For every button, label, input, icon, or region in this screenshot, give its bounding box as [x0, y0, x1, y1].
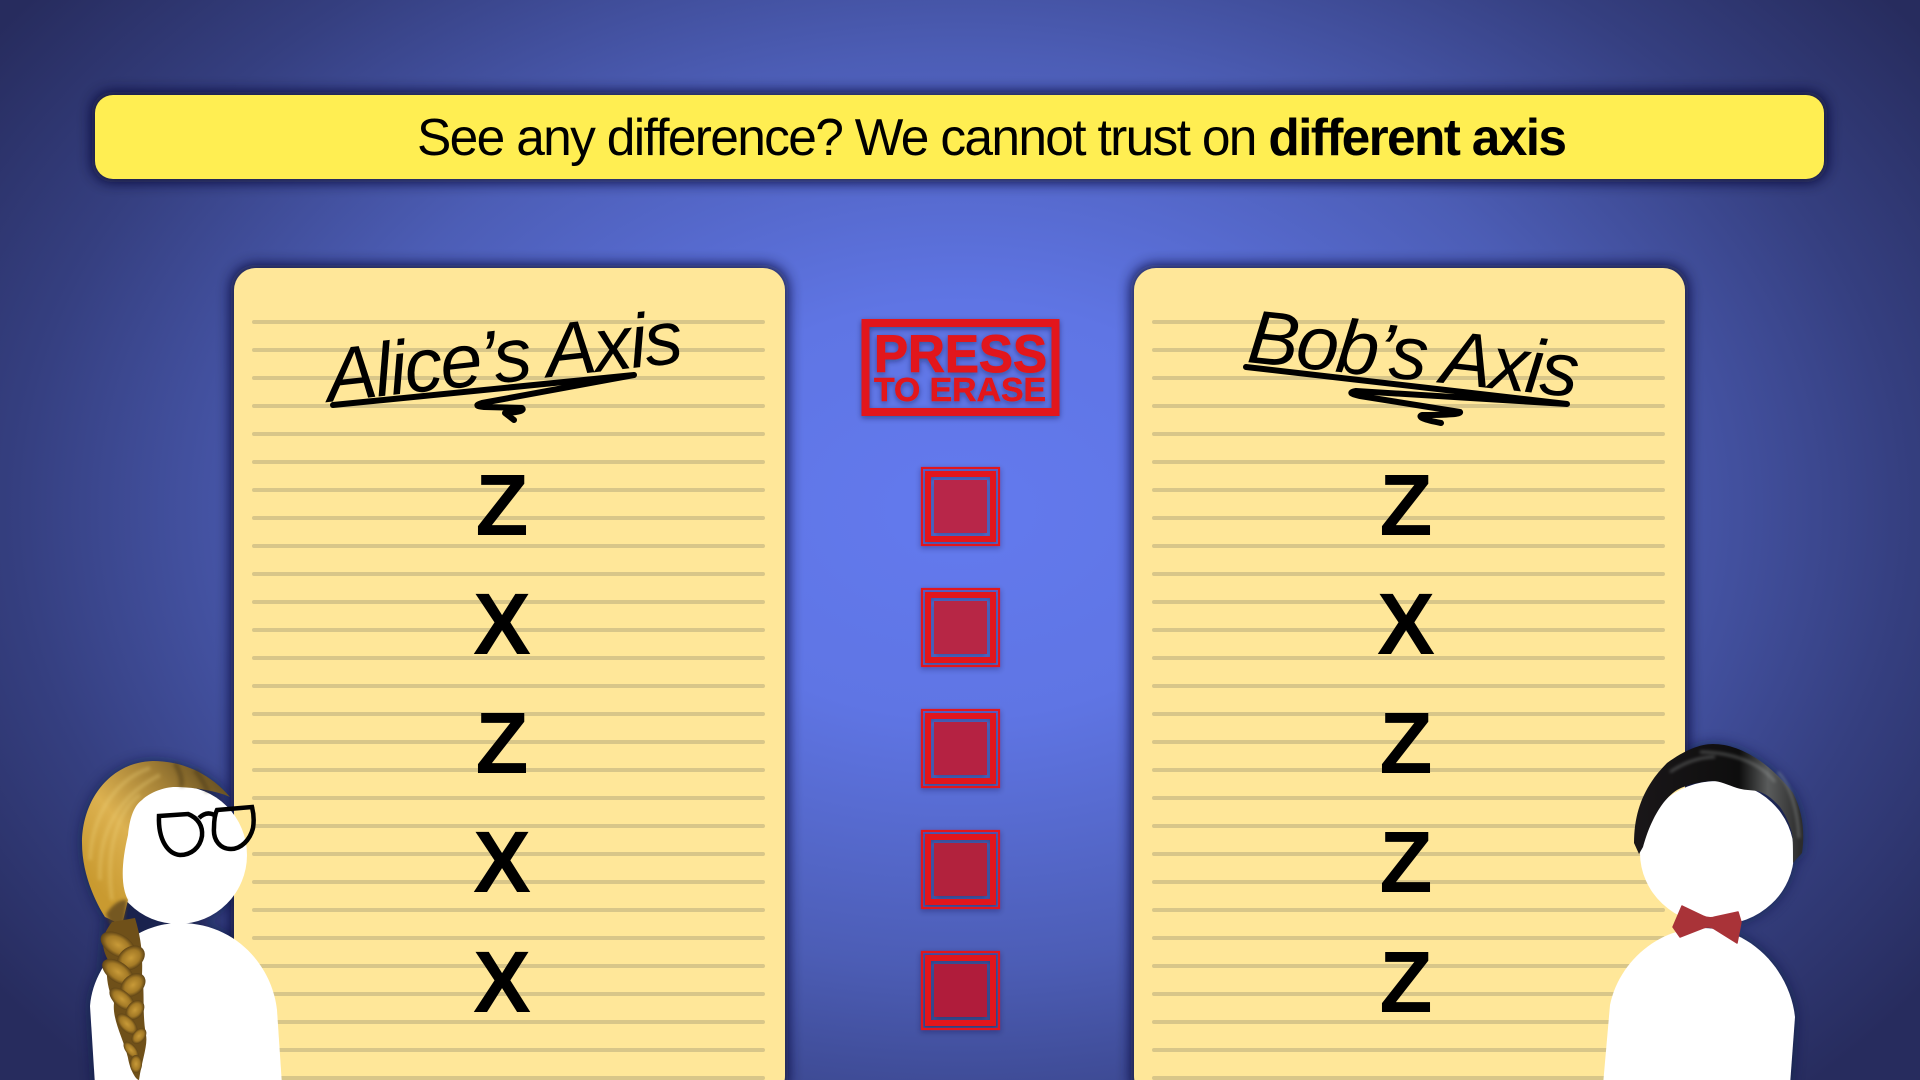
panel: Bob's axis	[1131, 265, 1688, 1080]
button 3	[922, 710, 999, 787]
letters: Alice's answers: Z	[475, 457, 529, 554]
letters: Alice's answers: X	[473, 576, 531, 673]
button 5	[922, 952, 999, 1029]
letters: Bob's answers: X	[1377, 576, 1435, 673]
character shadows	[82, 744, 1803, 1080]
letters: Alice's answers: X	[473, 814, 531, 911]
erase buttons	[922, 468, 999, 1029]
heading: Bob's Axis: Bob’s Axis	[1244, 294, 1583, 414]
underline scribble	[1246, 367, 1567, 423]
button 2	[922, 589, 999, 666]
banner	[92, 92, 1827, 182]
body	[1603, 928, 1795, 1080]
banner: See any difference? We cannot trust on different axis	[417, 108, 1567, 166]
character: Alice	[82, 761, 282, 1080]
panel: Alice's axis	[231, 265, 788, 1080]
letters: Alice's answers	[473, 457, 531, 1031]
stamp: press to erase: TO ERASE	[874, 371, 1046, 408]
body	[90, 923, 282, 1080]
letters: Bob's answers: Z	[1379, 695, 1433, 792]
letters: Bob's answers	[1377, 457, 1435, 1031]
letters: Bob's answers: Z	[1379, 934, 1433, 1031]
letters: Bob's answers: Z	[1379, 814, 1433, 911]
stamp: press to erase: PRESS	[874, 325, 1047, 384]
character: Bob	[1603, 744, 1803, 1080]
stamp: press to erase	[866, 323, 1056, 412]
braid	[96, 918, 150, 1080]
letters: Bob's answers: Z	[1379, 457, 1433, 554]
button 4	[922, 831, 999, 908]
heading: Alice's Axis: Alice’s Axis	[317, 295, 687, 419]
bow tie	[1673, 906, 1741, 943]
glasses	[159, 807, 254, 855]
button 1	[922, 468, 999, 545]
letters: Alice's answers: X	[473, 934, 531, 1031]
head	[109, 786, 247, 924]
head	[1640, 781, 1794, 925]
hair	[82, 761, 230, 928]
letters: Alice's answers: Z	[475, 695, 529, 792]
hair	[1634, 744, 1803, 863]
underline scribble	[333, 375, 634, 420]
